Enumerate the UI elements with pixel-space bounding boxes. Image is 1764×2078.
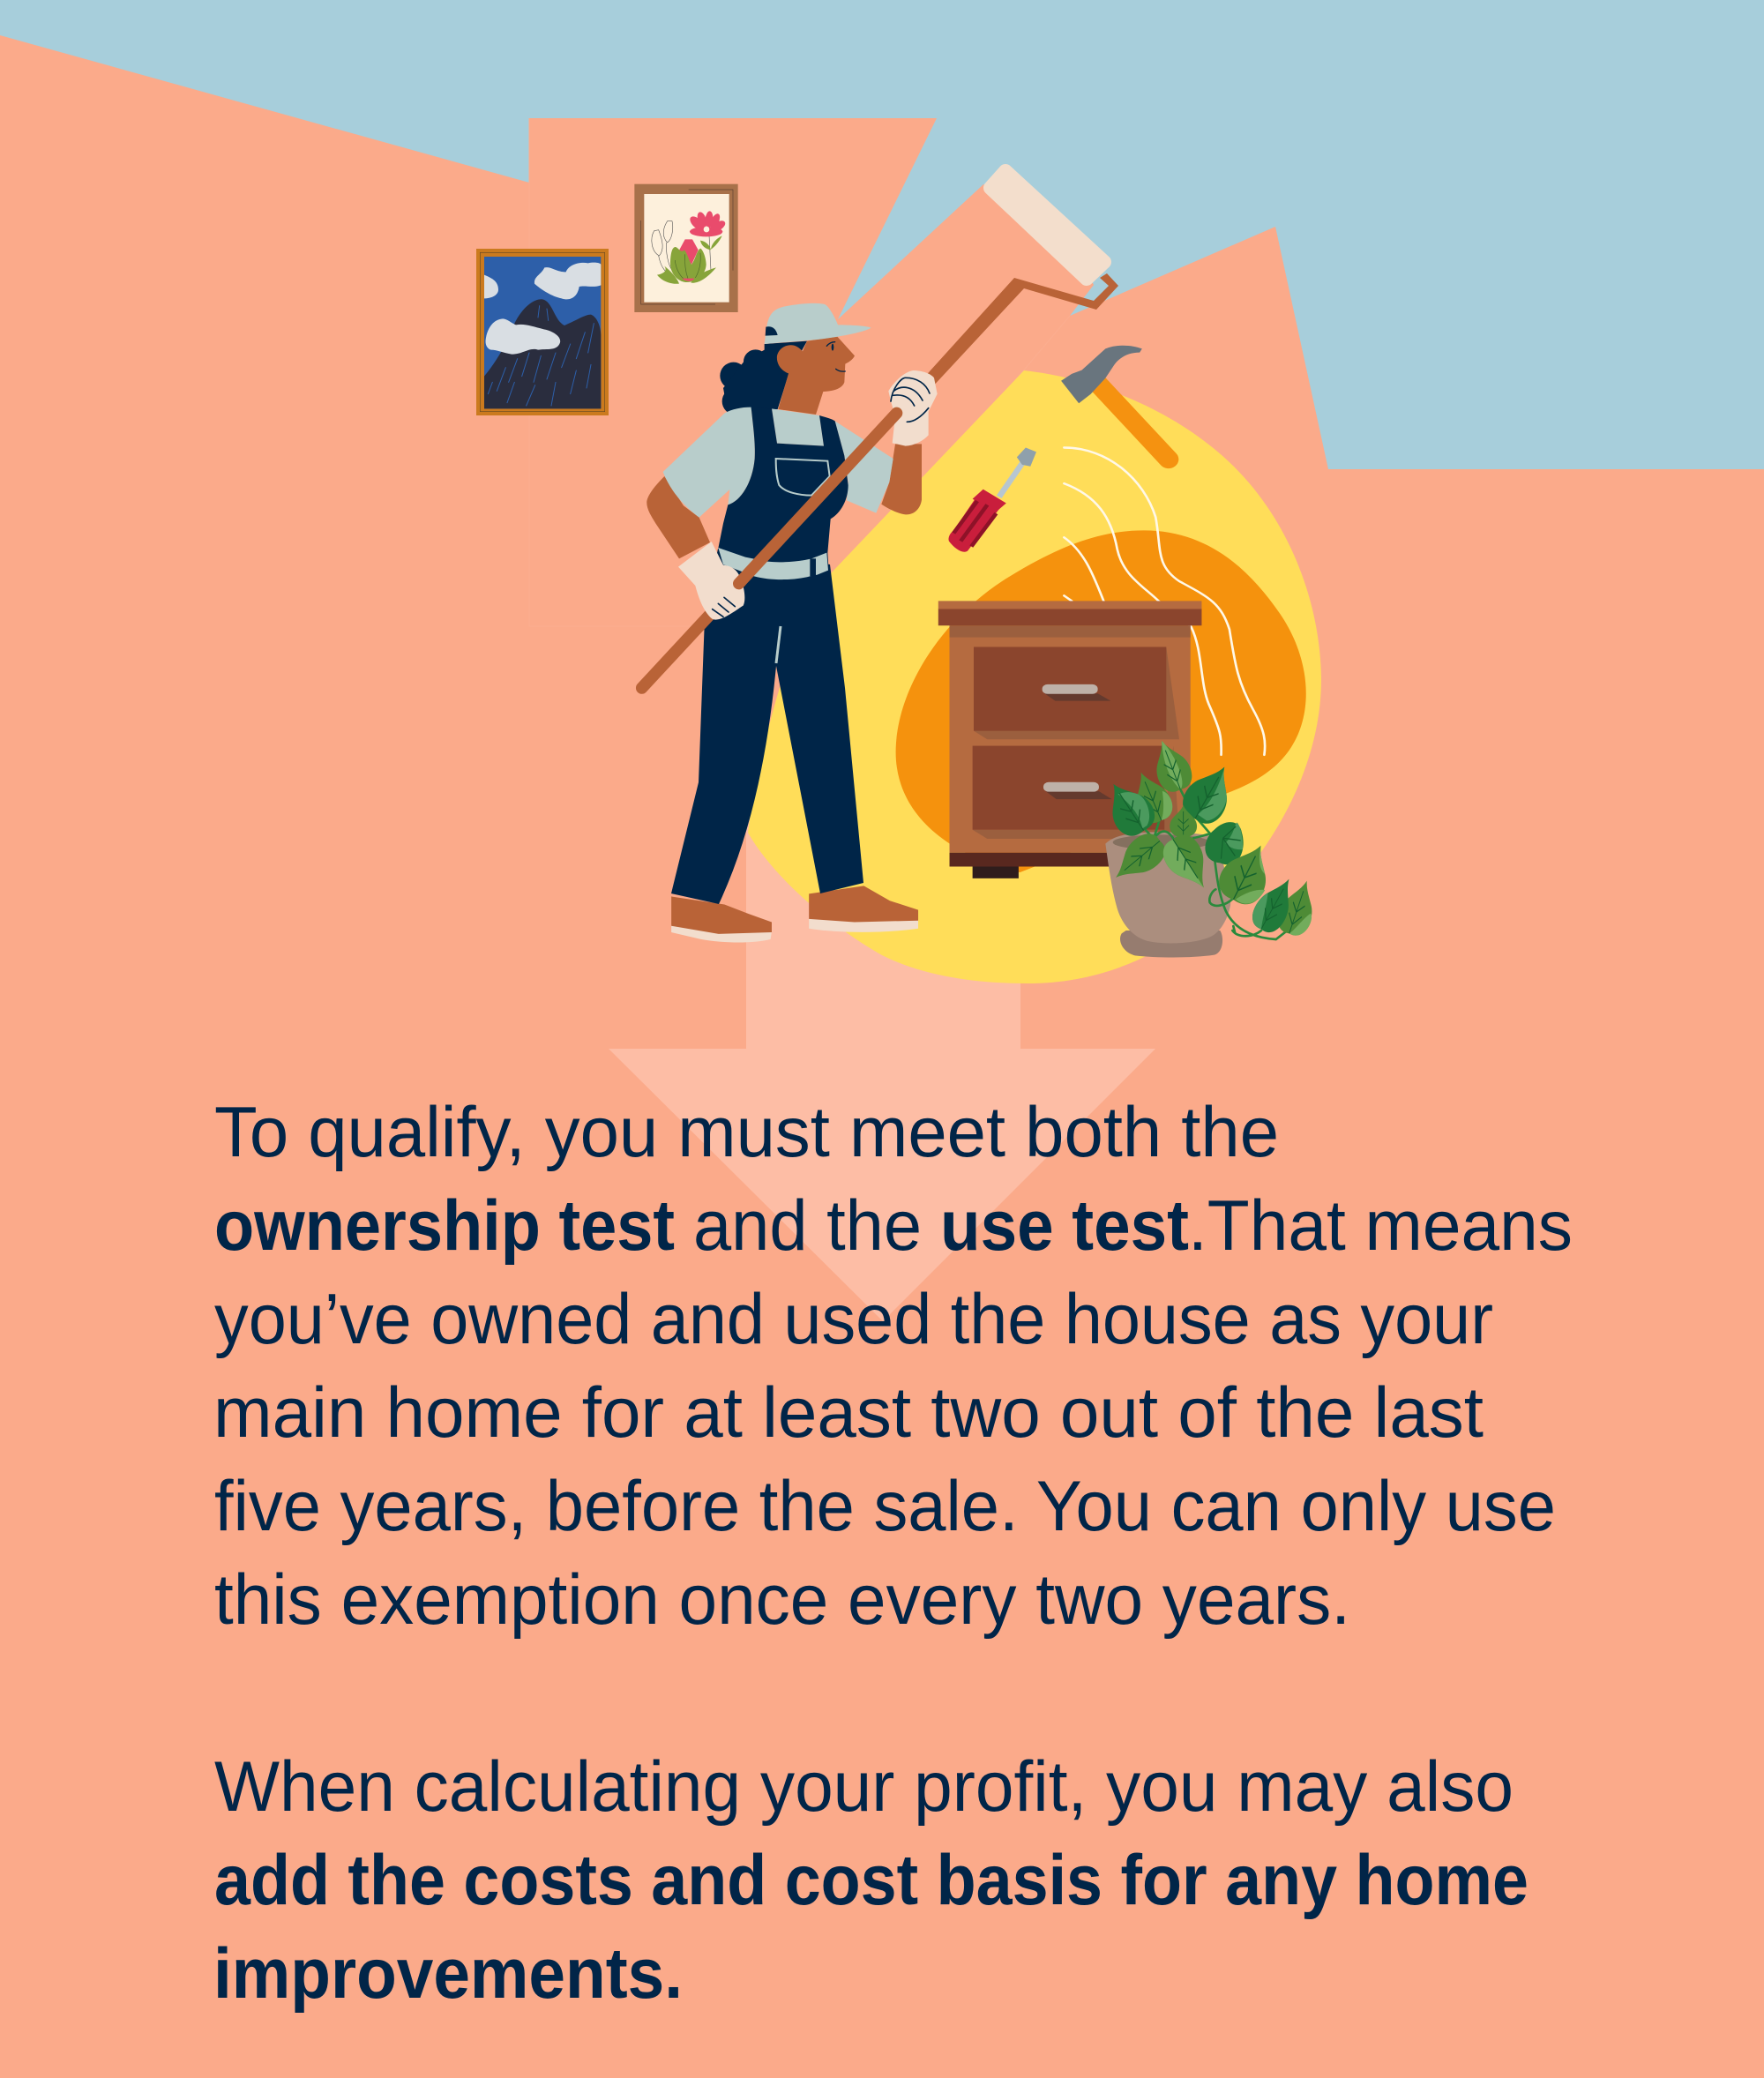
neck and face [777,337,855,415]
text block: qualification rules: this exemption once every two years. [214,1560,1350,1640]
icon: screwdriver [949,447,1036,552]
hat [765,303,871,344]
text block: qualification rules: To qualify, you must meet both the [214,1093,1279,1172]
faint wall seams [529,118,1070,626]
text block: qualification rules: ownership test [214,1186,675,1266]
belt loop [810,558,816,576]
woman: lower pole [642,581,741,688]
white swirl lines [1064,447,1265,755]
leaves [1146,735,1196,796]
cabinet [938,601,1201,878]
upper glove [739,370,938,584]
pot [1105,832,1230,943]
right arm [881,444,922,514]
potted plant [1096,735,1323,957]
yellow blob [748,370,1321,983]
illustration group: cabinet, swirls, tools [671,346,1306,943]
pole top over glove [739,413,897,584]
text block: calculating profit: add the costs and cost basis for any home [214,1841,1529,1920]
woman's lower shoes [671,886,918,943]
roller pole and bracket [887,273,1118,426]
text block: calculating profit: When calculating your profit, you may also [214,1747,1514,1827]
pot opening [1113,834,1210,850]
shirt [663,407,893,518]
text block: qualification rules: five years, before the sale. You can only use [214,1467,1556,1546]
text block: qualification rules [213,1093,1573,1640]
text block: calculating profit: improvements. [213,1934,683,2014]
woman: seam on trousers [776,626,781,663]
text block: qualification rules: .That means [1188,1186,1573,1266]
text block: qualification rules: you’ve owned and used the house as your [214,1280,1493,1359]
woman: upper body [647,303,922,620]
icon: hammer [1061,346,1169,460]
arrow pointing down [609,794,1155,1321]
background: blue sky shape [0,0,1764,469]
hair [720,341,807,415]
orange blob [896,530,1306,872]
text block: qualification rules: and the [693,1186,922,1266]
belt [718,548,828,579]
text block: qualification rules: use test [940,1186,1189,1266]
picture frame: flower [634,184,738,312]
left arm [647,476,710,558]
text block: qualification rules: main home for at least two out of the last [213,1373,1484,1453]
lower glove [678,542,744,620]
overalls bib [718,407,848,579]
stems [1144,789,1285,939]
paint roller [990,171,1104,279]
text block: calculating profit [213,1747,1529,2014]
pot saucer [1120,931,1222,957]
bib pocket [776,459,830,496]
picture frame: mountain [476,249,609,415]
woman: overalls legs [671,549,863,904]
